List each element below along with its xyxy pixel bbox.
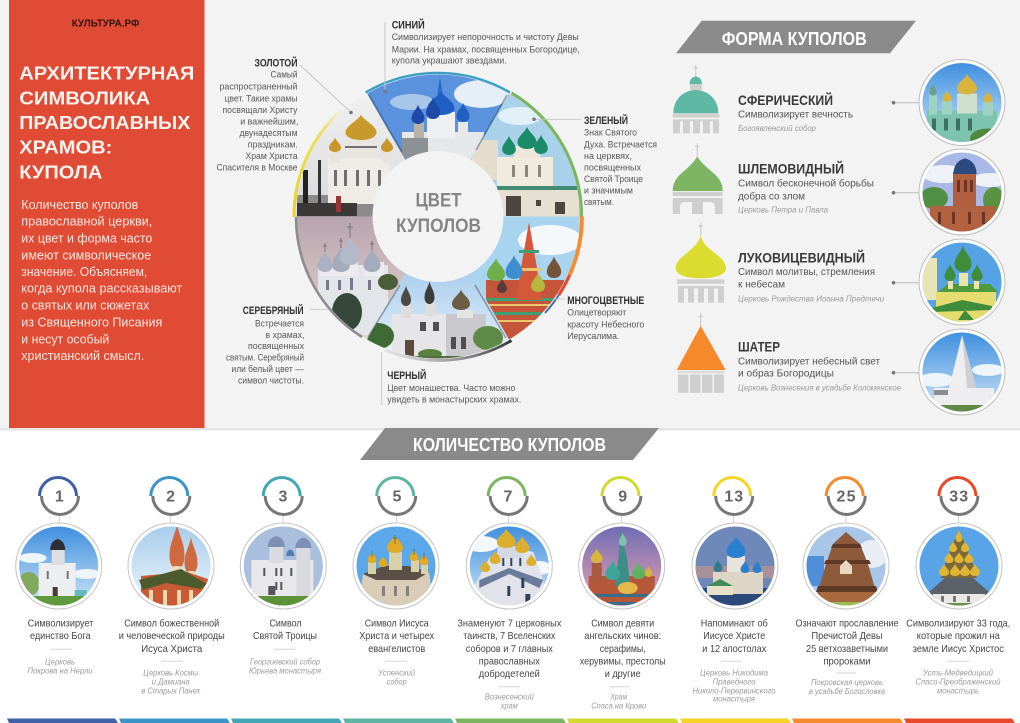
label: green: Святой Троице: [584, 174, 643, 185]
shape text: ШАТЕР: [738, 339, 780, 355]
icon: tent roof: [677, 313, 726, 393]
description: Покровская церковь: [811, 677, 883, 687]
number ring: 3: [279, 489, 288, 506]
description: [249, 618, 321, 675]
label: gold: и важнейшим,: [240, 117, 298, 128]
intro paragraph: о святых или сюжетах: [21, 299, 150, 313]
item: 7 domes: [457, 478, 562, 710]
shape text: ЛУКОВИЦЕВИДНЫЙ: [738, 249, 865, 266]
label: green: и значимым: [584, 186, 633, 197]
item: 9 domes: [579, 478, 666, 710]
photo: church of the Ascension: [918, 329, 1005, 415]
icon: onion dome: [676, 223, 726, 303]
number ring: [939, 478, 978, 523]
photo: Church of the Saviour on Blood: [579, 523, 665, 609]
item: 5 domes: [353, 478, 439, 686]
description: таинств, 7 Вселенских: [463, 630, 556, 642]
number ring: [602, 478, 641, 523]
description: Николо-Перервинского: [692, 685, 776, 695]
label: black: увидеть в монастырских храмах.: [387, 394, 521, 405]
banner: number of domes: [360, 428, 659, 460]
wheel title: ЦВЕТ: [416, 191, 462, 212]
label: silver: в храмах,: [266, 330, 304, 341]
label: gold: цвет. Такие храмы: [224, 93, 298, 104]
description: Напоминают об: [701, 618, 768, 630]
label: gold: Самый: [270, 70, 298, 81]
label: gold: двунадесятым: [240, 128, 298, 139]
description: единство Бога: [30, 630, 91, 642]
connector: [894, 192, 919, 194]
label: silver: святым. Серебряный: [226, 353, 304, 364]
label: blue: [392, 18, 580, 66]
number ring: [714, 478, 753, 523]
description: [28, 618, 94, 675]
description: Знаменуют 7 церковных: [457, 618, 562, 630]
wheel title: [396, 191, 481, 237]
shape: helmet: Символ бесконечной борьбы: [738, 178, 874, 190]
description: Успенский: [377, 668, 415, 678]
description: Символ божественной: [124, 618, 219, 630]
number ring: 5: [393, 489, 402, 506]
label: silver: или белый цвет —: [232, 364, 304, 375]
label: gold: Храм Христа: [246, 151, 298, 162]
label: green: на церквях,: [584, 151, 632, 162]
shape: spherical: Символизирует вечность: [738, 108, 853, 120]
label: multicoloured: Иерусалима.: [567, 331, 619, 342]
sector: black: [367, 273, 509, 358]
description: добродетелей: [479, 668, 540, 680]
label: silver: символ чистоты.: [238, 375, 304, 386]
number ring: [826, 478, 865, 523]
chart: dome colour wheel: [290, 70, 588, 365]
item: 13 domes: [692, 478, 778, 704]
number ring: 9: [618, 489, 627, 506]
description: Вознесенский: [485, 691, 534, 701]
shape: spherical: [673, 60, 1005, 148]
title: ХРАМОВ:: [19, 138, 112, 158]
description: Юрьева монастыря: [249, 665, 321, 675]
description: и Дамиана: [152, 676, 190, 686]
description: херувимы, престолы: [580, 655, 666, 667]
description: Исуса Христа: [141, 643, 202, 655]
photo: Church of the Intercession on the Nerl: [16, 523, 102, 609]
shape text: СФЕРИЧЕСКИЙ: [738, 91, 833, 108]
label: green: Знак Святого: [584, 128, 637, 139]
shape: helmet: [673, 143, 1008, 235]
number ring: [377, 478, 416, 523]
description: собор: [387, 676, 407, 686]
photo: church of the Nativity of John: [919, 239, 1005, 325]
title: [19, 63, 194, 182]
label: gold: ЗОЛОТОЙ: [254, 57, 298, 70]
description: Означают прославление: [796, 618, 899, 630]
shape: onion: [676, 223, 1005, 325]
icon: spherical dome: [673, 65, 719, 133]
sector: green: [470, 94, 580, 216]
description: пророками: [824, 655, 871, 667]
shape: onion: к небесам: [738, 279, 785, 291]
description: Праведного: [712, 676, 756, 686]
intro paragraph: и несут особый: [21, 332, 109, 346]
connector: [894, 282, 919, 284]
description: серафимы,: [600, 643, 646, 655]
number ring: 25: [836, 489, 856, 506]
shape: spherical: Богоявленский собор: [738, 123, 816, 133]
photo: Ust-Medveditsky monastery: [916, 523, 1002, 609]
description: православных: [479, 655, 540, 667]
label: gold: посвящали Христу: [222, 105, 298, 116]
label: silver: Встречается: [255, 319, 304, 330]
photo: Ascension Cathedral: [463, 523, 552, 609]
description: монастырь: [937, 685, 979, 695]
description: Символ Иисуса: [365, 618, 429, 630]
shape: tent: Символизирует небесный свет: [738, 355, 880, 367]
description: Иисусе Христе: [703, 630, 765, 642]
intro paragraph: значение. Объясняем,: [21, 265, 147, 279]
wheel title: КУПОЛОВ: [396, 216, 481, 237]
photo: Epiphany cathedral: [919, 60, 1005, 148]
item: 2 domes: [119, 478, 225, 695]
photo: church of Peter and Paul: [919, 149, 1008, 235]
label: blue: СИНИЙ: [392, 18, 425, 31]
photo: Assumption Cathedral: [353, 523, 439, 609]
sector edge shadows: [368, 95, 507, 338]
label: multicoloured: красоту Небесного: [567, 319, 644, 330]
description: Храм: [609, 691, 627, 701]
description: ангельских чинов:: [584, 630, 661, 642]
shape: tent: и образ Богородицы: [738, 368, 834, 380]
description: Символизирует: [28, 618, 94, 630]
shape: onion: Символ молитвы, стремления: [738, 266, 875, 278]
description: Церковь: [45, 656, 75, 666]
title: АРХИТЕКТУРНАЯ: [19, 63, 194, 83]
site name: КУЛЬТУРА.РФ: [72, 18, 140, 30]
intro paragraph: имеют символическое: [21, 248, 151, 262]
sector: blue: [367, 74, 509, 160]
title: ПРАВОСЛАВНЫХ: [19, 113, 190, 133]
description: Пречистой Девы: [812, 630, 882, 642]
intro paragraph: когда купола рассказывают: [21, 282, 183, 296]
label: silver: [226, 304, 304, 386]
shape: tent: Церковь Вознесения в усадьбе Коломенское: [738, 383, 901, 393]
label: multicoloured: Олицетворяют: [567, 308, 627, 319]
intro paragraph: их цвет и форма часто: [21, 231, 152, 245]
intro paragraph: православной церкви,: [21, 215, 152, 229]
number ring: 13: [724, 489, 743, 506]
number ring: 33: [949, 489, 968, 506]
number ring: [40, 478, 78, 523]
description: Христа и четырех: [359, 630, 435, 642]
photo: Church of Nicodemus the Righteous: [692, 523, 778, 609]
description: и человеческой природы: [119, 630, 225, 642]
description: Спасо-Преображенский: [916, 676, 1001, 686]
description: Покрова на Нерли: [28, 665, 93, 675]
label: black: [387, 369, 521, 405]
description: Символ девяти: [591, 618, 654, 630]
sector: silver: [296, 216, 406, 340]
description: в Старых Панех: [141, 685, 201, 695]
panel: intro: [9, 0, 204, 428]
description: [692, 618, 776, 704]
label: blue: Марии. На храмах, посвященных Богородице,: [392, 44, 580, 55]
intro paragraph: из Священного Писания: [21, 315, 162, 329]
number ring: [151, 478, 190, 523]
number ring: 7: [504, 489, 513, 506]
label: gold: Спасителя в Москве: [216, 162, 298, 173]
shape: onion: Церковь Рождества Иоанна Предтечи: [738, 294, 884, 304]
title: СИМВОЛИКА: [19, 88, 150, 108]
sector: multicoloured: [470, 216, 580, 340]
description: которые прожил на: [917, 630, 1000, 642]
leader lines: [300, 22, 581, 405]
description: [580, 618, 666, 710]
description: соборов и 7 главных: [466, 643, 553, 655]
label: blue: Символизирует непорочность и чистоту Девы: [392, 32, 579, 43]
description: монастыря: [713, 694, 755, 704]
icon: helmet dome: [673, 143, 723, 214]
item: 1 dome: [16, 478, 102, 675]
description: [796, 618, 899, 696]
label: multicoloured: [567, 295, 644, 342]
description: и другие: [605, 668, 641, 680]
item: 33 domes: [906, 478, 1010, 695]
description: Святой Троицы: [253, 630, 317, 642]
photo: Church of Cosmas and Damian: [128, 523, 214, 609]
label: multicoloured: МНОГОЦВЕТНЫЕ: [567, 295, 644, 307]
photo: St George's Cathedral: [240, 523, 326, 609]
intro paragraph: Количество куполов: [21, 198, 139, 212]
description: [359, 618, 435, 686]
label: green: посвященных: [584, 163, 641, 174]
photo: Intercession Church in Bogoslovka: [803, 523, 889, 609]
title: КУПОЛА: [19, 162, 102, 182]
description: Церковь Никодима: [700, 668, 768, 678]
description: в усадьбе Богословка: [809, 686, 885, 696]
connector: [894, 372, 919, 374]
shape: tent: [677, 313, 1005, 415]
label: gold: праздникам.: [248, 139, 298, 150]
shape text: ШЛЕМОВИДНЫЙ: [738, 160, 844, 176]
top panel background: [0, 0, 1020, 428]
number ring: [488, 478, 527, 523]
description: 25 ветхозаветными: [806, 643, 888, 655]
description: Символ: [270, 618, 302, 630]
label: black: ЧЕРНЫЙ: [387, 369, 426, 382]
connector: [894, 102, 919, 104]
banner: dome shape: ФОРМА КУПОЛОВ: [722, 29, 867, 49]
number ring: 1: [55, 489, 64, 506]
wheel centre: [372, 151, 504, 282]
label: green: [584, 114, 657, 208]
label: green: святым.: [584, 197, 614, 208]
label: silver: посвященных: [248, 341, 304, 352]
label: gold: распространенный: [220, 81, 298, 92]
intro paragraph: [21, 198, 183, 363]
footer colour bar: [7, 718, 1015, 723]
banner: number of domes: КОЛИЧЕСТВО КУПОЛОВ: [413, 435, 606, 455]
shape: helmet: добра со злом: [738, 190, 805, 202]
sector: gold: [296, 114, 405, 216]
banner: dome shape: [676, 21, 916, 53]
description: земле Иисус Христос: [913, 643, 1004, 655]
description: [906, 618, 1010, 695]
description: [119, 618, 225, 695]
label: black: Цвет монашества. Часто можно: [387, 383, 515, 394]
colour arcs: [294, 73, 582, 360]
description: Георгиевский собор: [250, 656, 320, 666]
label: gold: [216, 57, 298, 173]
label: blue: купола украшают звездами.: [392, 55, 507, 66]
description: Церковь Космы: [143, 668, 199, 678]
description: евангелистов: [368, 643, 426, 655]
description: Усть-Медведицкий: [922, 668, 993, 678]
description: храм: [500, 700, 518, 710]
description: Спаса на Крови: [591, 700, 646, 710]
label: green: Духа. Встречается: [584, 140, 657, 151]
shape: helmet: Церковь Петра и Павла: [738, 205, 828, 215]
description: [457, 618, 562, 710]
item: 3 domes: [240, 478, 326, 675]
number ring: 2: [166, 489, 175, 506]
description: и 12 апостолах: [702, 643, 767, 655]
intro paragraph: христианский смысл.: [21, 349, 144, 363]
label: silver: СЕРЕБРЯНЫЙ: [243, 304, 304, 317]
label: green: ЗЕЛЕНЫЙ: [584, 114, 628, 127]
item: 25 domes: [796, 478, 899, 696]
number ring: [263, 478, 302, 523]
